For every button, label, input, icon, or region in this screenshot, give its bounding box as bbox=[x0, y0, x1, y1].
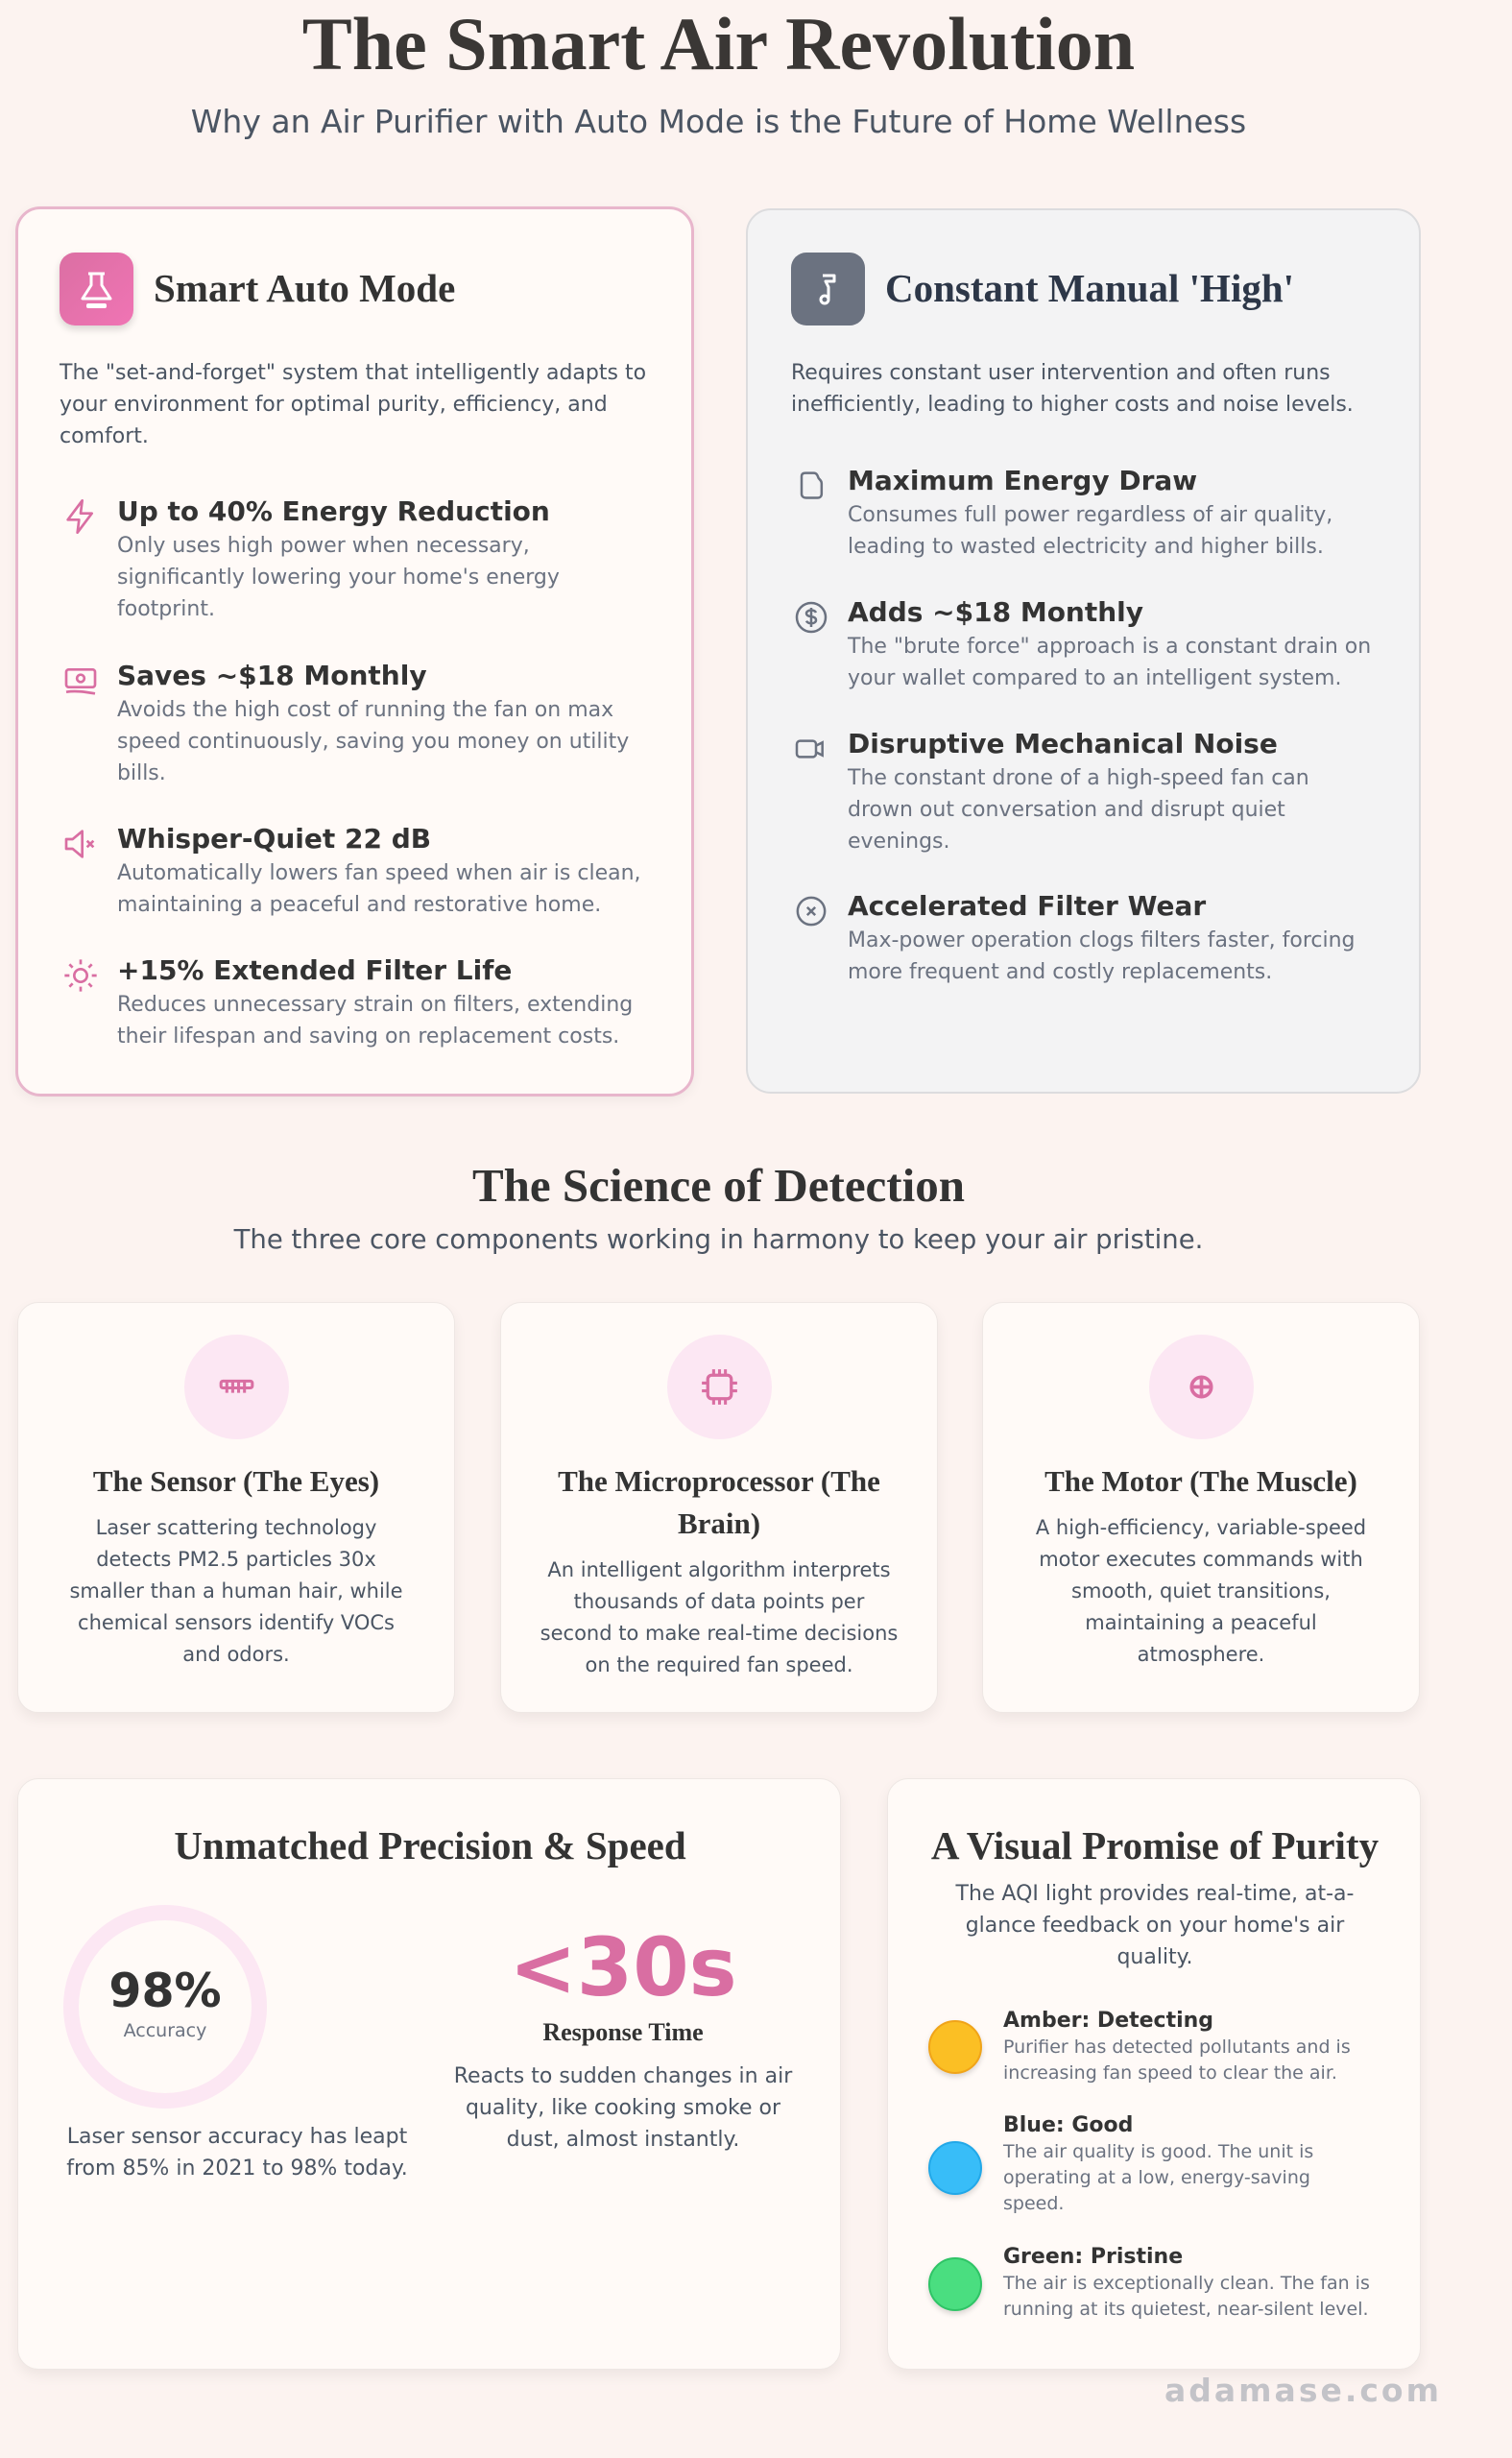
watermark: adamase.com bbox=[1164, 2372, 1442, 2409]
card: motor: maintaining a peaceful bbox=[1085, 1611, 1317, 1634]
label: blue bbox=[1002, 2113, 1313, 2214]
chart: accuracy ring: 98% bbox=[108, 1964, 222, 2018]
label: amber: increasing fan speed to clear the air. bbox=[1003, 2062, 1337, 2084]
item: energy: Only uses high power when necessary, bbox=[117, 534, 530, 558]
heading: Constant Manual 'High' bbox=[885, 266, 1294, 310]
item: energy: Up to 40% Energy Reduction bbox=[117, 495, 550, 527]
description bbox=[60, 361, 646, 448]
label: blue: Blue: Good bbox=[1003, 2113, 1133, 2137]
card: sensor: The Sensor (The Eyes) bbox=[93, 1464, 379, 1498]
item: filter: their lifespan and saving on replacement costs. bbox=[117, 1024, 619, 1048]
item: noise bbox=[795, 728, 1309, 854]
item: noise: drown out conversation and disrupt quiet bbox=[848, 798, 1285, 822]
description: Requires constant user intervention and often runs bbox=[791, 361, 1331, 385]
card: sensor: chemical sensors identify VOCs bbox=[78, 1611, 395, 1634]
section heading: science: The Science of Detection bbox=[472, 1159, 965, 1212]
label: green: running at its quietest, near-silent level. bbox=[1003, 2299, 1369, 2320]
card: sensor: and odors. bbox=[182, 1643, 290, 1666]
item: cost: your wallet compared to an intelligent system. bbox=[848, 666, 1341, 690]
item: noise: The constant drone of a high-speed fan can bbox=[848, 766, 1309, 790]
item: savings: bills. bbox=[117, 761, 166, 785]
item: cost: The "brute force" approach is a constant drain on bbox=[848, 635, 1371, 659]
item: filter: +15% Extended Filter Life bbox=[117, 954, 512, 986]
stat: response time: Reacts to sudden changes in air bbox=[454, 2064, 792, 2088]
icon: chip bbox=[667, 1335, 772, 1439]
item: energy draw: Consumes full power regardless of air quality, bbox=[848, 503, 1332, 527]
item: quiet: Whisper-Quiet 22 dB bbox=[117, 823, 431, 855]
card: sensor bbox=[17, 1302, 455, 1713]
panel: constant manual high bbox=[746, 208, 1421, 1094]
item: savings: Avoids the high cost of running the fan on max bbox=[117, 698, 613, 722]
chart: accuracy ring bbox=[63, 1905, 267, 2109]
item: energy draw bbox=[801, 465, 1332, 559]
indicator: blue bbox=[928, 2141, 982, 2195]
card: microprocessor: thousands of data points per bbox=[574, 1590, 864, 1613]
description: The AQI light provides real-time, at-a- bbox=[956, 1882, 1354, 1906]
title: The Smart Air Revolution bbox=[302, 2, 1135, 85]
label: blue: operating at a low, energy-saving bbox=[1003, 2167, 1310, 2188]
description: The "set-and-forget" system that intelligently adapts to bbox=[60, 361, 646, 385]
panel: visual promise bbox=[887, 1778, 1421, 2370]
card: sensor: detects PM2.5 particles 30x bbox=[96, 1548, 376, 1571]
card: microprocessor: on the required fan speed. bbox=[586, 1653, 852, 1676]
card: microprocessor: Brain) bbox=[678, 1506, 760, 1540]
label: blue: The air quality is good. The unit is bbox=[1003, 2141, 1313, 2162]
item: quiet bbox=[65, 823, 641, 917]
item: energy draw: leading to wasted electricity and higher bills. bbox=[848, 535, 1324, 559]
item: filter bbox=[64, 954, 633, 1048]
description bbox=[955, 1882, 1354, 1969]
icon: fan bbox=[1149, 1335, 1254, 1439]
card: motor: smooth, quiet transitions, bbox=[1071, 1579, 1331, 1603]
indicator: amber bbox=[928, 2020, 982, 2074]
item: energy draw: Maximum Energy Draw bbox=[848, 465, 1197, 496]
item: filter wear: Max-power operation clogs filters faster, forcing bbox=[848, 928, 1356, 952]
subtitle: Why an Air Purifier with Auto Mode is the Future of Home Wellness bbox=[191, 103, 1246, 140]
icon: sensor bbox=[184, 1335, 289, 1439]
icon: music note bbox=[791, 253, 865, 325]
card: sensor: smaller than a human hair, while bbox=[69, 1579, 403, 1603]
card: microprocessor: An intelligent algorithm interprets bbox=[547, 1558, 891, 1581]
card: motor: atmosphere. bbox=[1138, 1643, 1264, 1666]
card: microprocessor bbox=[500, 1302, 938, 1713]
item: savings bbox=[65, 660, 629, 785]
caption: accuracy: Laser sensor accuracy has leapt bbox=[67, 2125, 407, 2149]
label: amber: Purifier has detected pollutants and is bbox=[1003, 2036, 1351, 2058]
item: cost: Adds ~$18 Monthly bbox=[848, 596, 1143, 628]
item: cost bbox=[795, 596, 1371, 690]
card: motor: A high-efficiency, variable-speed bbox=[1036, 1516, 1366, 1539]
section subtitle: The three core components working in harmony to keep your air pristine. bbox=[234, 1224, 1203, 1255]
panel: smart auto mode bbox=[15, 206, 694, 1096]
stat: response time: Response Time bbox=[542, 2018, 704, 2046]
icon: flask bbox=[60, 253, 133, 325]
item: filter wear: more frequent and costly replacements. bbox=[848, 960, 1272, 984]
item: savings: speed continuously, saving you money on utility bbox=[117, 730, 629, 754]
heading: Smart Auto Mode bbox=[154, 266, 455, 310]
card: motor: The Motor (The Muscle) bbox=[1044, 1464, 1357, 1498]
item: filter wear: Accelerated Filter Wear bbox=[848, 890, 1206, 922]
description: quality. bbox=[1116, 1945, 1193, 1969]
description bbox=[791, 361, 1354, 417]
item: energy bbox=[66, 495, 560, 621]
description: inefficiently, leading to higher costs and noise levels. bbox=[791, 393, 1354, 417]
item: quiet: maintaining a peaceful and restorative home. bbox=[117, 893, 601, 917]
item: savings: Saves ~$18 Monthly bbox=[117, 660, 427, 691]
chart: accuracy ring: Accuracy bbox=[124, 2020, 206, 2041]
item: filter wear bbox=[797, 890, 1356, 984]
item: energy: significantly lowering your home's energy bbox=[117, 566, 560, 590]
card: microprocessor: The Microprocessor (The bbox=[558, 1464, 880, 1498]
card: microprocessor: second to make real-time decisions bbox=[540, 1622, 898, 1645]
heading: A Visual Promise of Purity bbox=[931, 1823, 1379, 1868]
indicator: green bbox=[928, 2257, 982, 2311]
label: amber: Amber: Detecting bbox=[1003, 2009, 1213, 2033]
stat: response time: dust, almost instantly. bbox=[507, 2128, 739, 2152]
description: comfort. bbox=[60, 424, 149, 448]
heading: Unmatched Precision & Speed bbox=[174, 1823, 686, 1868]
card: motor bbox=[982, 1302, 1420, 1713]
item: noise: evenings. bbox=[848, 830, 950, 854]
stat: response time: <30s bbox=[509, 1920, 737, 2014]
item: filter: Reduces unnecessary strain on filters, extending bbox=[117, 993, 633, 1017]
description: your environment for optimal purity, efficiency, and bbox=[60, 393, 608, 417]
card: sensor: Laser scattering technology bbox=[96, 1516, 376, 1539]
label: green: The air is exceptionally clean. The fan is bbox=[1003, 2273, 1370, 2294]
label: green: Green: Pristine bbox=[1003, 2245, 1183, 2269]
label: green bbox=[1002, 2245, 1370, 2320]
stat: response time bbox=[454, 1920, 793, 2152]
description: glance feedback on your home's air bbox=[966, 1914, 1344, 1938]
stat: response time: quality, like cooking smoke or bbox=[466, 2096, 780, 2120]
item: energy: footprint. bbox=[117, 597, 215, 621]
label: blue: speed. bbox=[1003, 2193, 1064, 2214]
item: noise: Disruptive Mechanical Noise bbox=[848, 728, 1278, 759]
panel: precision & speed bbox=[17, 1778, 841, 2370]
caption: accuracy: from 85% in 2021 to 98% today. bbox=[66, 2157, 408, 2181]
caption: accuracy bbox=[66, 2125, 408, 2181]
label: amber bbox=[1003, 2009, 1351, 2084]
item: quiet: Automatically lowers fan speed when air is clean, bbox=[117, 861, 641, 885]
card: motor: motor executes commands with bbox=[1039, 1548, 1363, 1571]
